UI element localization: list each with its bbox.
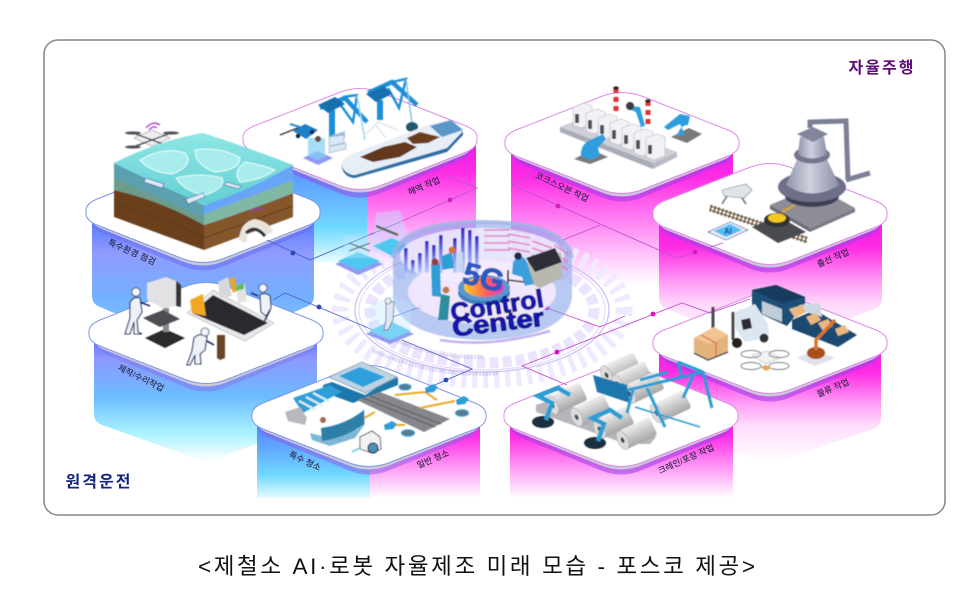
cylinder wall: [393, 222, 572, 340]
column: sea work (two-tone): [253, 139, 476, 272]
5G text: 5G: [459, 255, 508, 299]
loader: [293, 124, 318, 139]
robot dog: [722, 184, 752, 198]
AI chip: [708, 222, 748, 240]
column: coke oven work: [511, 142, 733, 285]
network lines: blue: [267, 222, 472, 387]
machine box: [752, 285, 805, 326]
wood post: [217, 335, 225, 360]
caption: <제철소 AI·로봇 자율제조 미래 모습 - 포스코 제공>: [198, 554, 755, 579]
robot bottom: [187, 335, 207, 365]
cleaning robot: [360, 431, 381, 453]
ring accent arc: [440, 331, 550, 343]
pink stripes on wall: [484, 230, 568, 270]
label: logistics work: 물류 작업: [815, 376, 851, 399]
control center floor rings: [340, 240, 624, 380]
column: cleaning (two-tone): [257, 415, 480, 498]
binary ring text: 00101100100110101011001001101010110010: [372, 348, 499, 376]
grey belt: [357, 392, 450, 432]
column: tapping work: [659, 213, 882, 350]
illustration: drill press, CNC and humanoid robots: [125, 277, 274, 365]
curved screen booth: [310, 408, 365, 446]
heading: autonomous driving: 자율주행: [848, 58, 914, 77]
Center text: Center: [451, 303, 546, 343]
forklift: [735, 304, 769, 342]
illustration: small stand with underwater robot: [372, 210, 408, 258]
label: general cleaning: 일반 청소: [415, 447, 451, 470]
plate: tapping work: [653, 164, 887, 272]
illustration: undersea soil block: [114, 133, 293, 250]
ladle car: [752, 216, 806, 243]
crane two: [368, 79, 417, 123]
label: special environment inspection: 특수환경 점검: [107, 236, 158, 267]
illustration: coke oven battery with robots: [560, 86, 702, 169]
network nodes: [291, 198, 697, 382]
network lines: magenta: [400, 172, 750, 385]
plate: fabrication and repair: [89, 282, 323, 391]
label: fabrication and repair work: 제작/수리작업: [116, 362, 166, 393]
robot left: [125, 298, 142, 334]
illustration: robot stand: [366, 296, 414, 344]
operator at console: [527, 252, 562, 288]
illustration: small stand with drone: [335, 235, 383, 275]
rail track: [710, 208, 807, 240]
crane one: [320, 95, 367, 140]
yellow arms: [352, 392, 455, 425]
column: logistics: [659, 342, 881, 464]
illustration: coil rolls, gantry and robot arms: [532, 352, 712, 451]
illustration: cranes, ship and operator on sea plate: [280, 79, 463, 178]
standing staff: [431, 263, 441, 297]
Control text: Control: [448, 285, 546, 327]
bar visual on wall: [404, 228, 479, 273]
column: fabrication and repair: [94, 332, 317, 462]
column: crane and packing: [510, 415, 733, 498]
plate: logistics: [653, 292, 887, 401]
plate: special environment inspection: [86, 162, 320, 270]
conveyor: [792, 310, 857, 347]
5G disc: [458, 281, 510, 305]
cleaning discs: [399, 384, 468, 436]
cardboard boxes: [694, 327, 728, 359]
panel: infographic frame: [44, 40, 945, 515]
orange robot arm: [797, 350, 835, 366]
illustration: blast furnace with ladle car: AI: [724, 227, 732, 236]
plate: sea work: [243, 88, 477, 197]
illustration: cleaning machinery: [285, 362, 469, 453]
label: special cleaning: 특수 청소: [287, 449, 323, 473]
illustration: logistics scene: [694, 285, 857, 371]
heading: remote operation: 원격운전: [66, 473, 130, 491]
ship: [341, 120, 463, 175]
illustration: drone with wifi: [125, 123, 179, 149]
logistics drone: [741, 350, 789, 371]
CNC machine: [187, 290, 274, 341]
VR operator stand: [303, 151, 333, 165]
robot right: [260, 294, 271, 316]
label: sea work: 해역 작업: [406, 174, 442, 197]
label: tapping work: 출선 작업: [815, 246, 851, 269]
binary ring text: 1100001001010110010011000100: [396, 340, 484, 359]
plate: coke oven work: [505, 92, 739, 201]
illustration: 5G control center cylinder: [393, 222, 572, 343]
label: crane and packing work: 크레인/포장 작업: [656, 441, 715, 476]
plate: crane and packing: [504, 366, 738, 474]
plate: cleaning: [252, 366, 486, 474]
illustration: blast furnace with ladle car: [708, 121, 870, 243]
label: coke oven work: 코크스오븐 작업: [534, 169, 591, 204]
column: special environment inspection: [92, 212, 314, 350]
